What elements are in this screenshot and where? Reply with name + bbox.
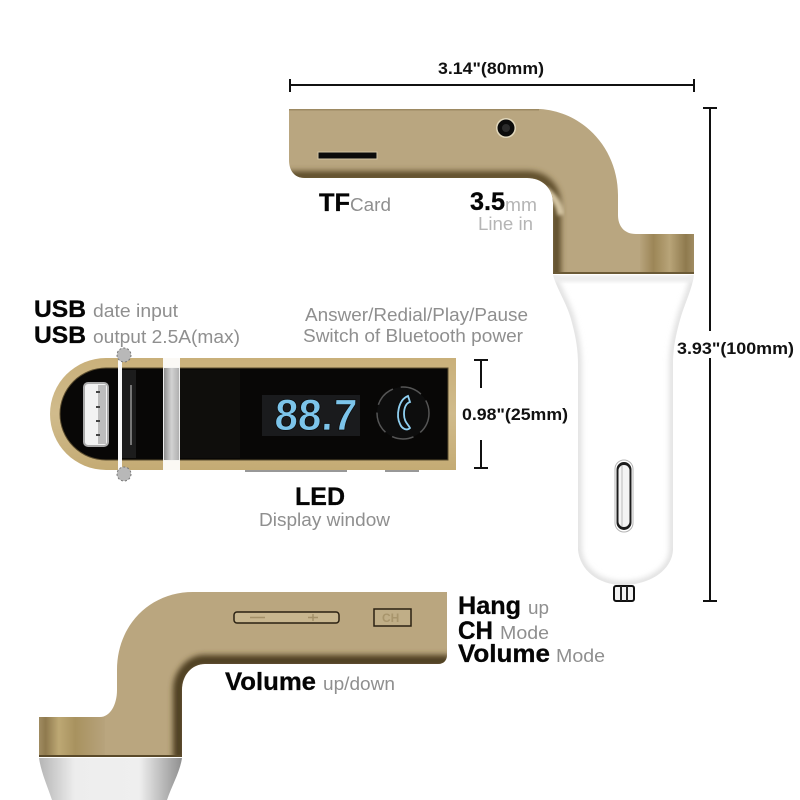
TF card slot: [318, 152, 377, 159]
3.5mm audio jack: [496, 118, 516, 138]
label: volume up/down: Volume: [225, 668, 316, 696]
label: LED display window: LED: [295, 483, 345, 511]
white charger body, rear view cropped: [39, 758, 182, 800]
label: USB ports: USB: [34, 322, 86, 349]
CH button: [374, 609, 411, 626]
label: TF card: [319, 189, 391, 217]
dimension: height 3.93 inch: 3.93"(100mm): [677, 340, 794, 358]
dimension: height 3.93 inch: [677, 108, 794, 601]
screw top: [117, 348, 131, 362]
label: TF card: TF: [319, 189, 350, 217]
metal side contact: [615, 460, 633, 532]
label: answer and bluetooth switch: Switch of Bluetooth power: [303, 326, 523, 346]
LED display: 88.7: [273, 391, 358, 440]
label: hang, CH and volume mode: Mode: [556, 646, 605, 666]
label: TF card: Card: [350, 195, 391, 215]
label: 3.5mm line in: Line in: [478, 214, 533, 234]
label: 3.5mm line in: mm: [505, 195, 537, 215]
label: LED display window: [259, 483, 391, 530]
label: hang, CH and volume mode: Mode: [500, 623, 549, 643]
phone touch button: [377, 387, 429, 439]
label: volume up/down: [225, 668, 395, 696]
dimension: width 3.14 inch: [290, 60, 694, 92]
CH button: CH: [382, 611, 399, 625]
label: 3.5mm line in: [470, 188, 537, 234]
label: hang, CH and volume mode: Hang: [458, 592, 521, 620]
charger contact tip: [614, 586, 634, 601]
label: USB ports: USB: [34, 296, 86, 323]
charger front view with display: [50, 348, 456, 481]
label: hang, CH and volume mode: CH: [458, 617, 493, 645]
dimension: depth 0.98 inch: [462, 360, 568, 468]
label: answer and bluetooth switch: Answer/Redial/Play/Pause: [305, 305, 528, 325]
USB port: [84, 383, 108, 446]
screw bottom: [117, 467, 131, 481]
dimension: width 3.14 inch: 3.14"(80mm): [438, 60, 544, 78]
label: USB ports: output 2.5A(max): [93, 327, 240, 347]
label: answer and bluetooth switch: [303, 305, 528, 346]
label: volume up/down: up/down: [323, 674, 395, 694]
label: hang, CH and volume mode: up: [528, 598, 549, 618]
label: 3.5mm line in: 3.5: [470, 188, 505, 216]
gold head, rear view with buttons: [39, 592, 450, 760]
label: USB ports: date input: [93, 301, 178, 321]
gold head, side view with TF slot and audio jack: [285, 109, 694, 280]
label: hang, CH and volume mode: Volume: [458, 640, 550, 668]
label: LED display window: Display window: [259, 510, 391, 530]
dimension: depth 0.98 inch: 0.98"(25mm): [462, 406, 568, 424]
label: USB ports: [34, 296, 240, 349]
label: hang, CH and volume mode: [458, 592, 605, 668]
volume rocker button: [234, 612, 339, 623]
white charger body, side view: [553, 275, 694, 601]
